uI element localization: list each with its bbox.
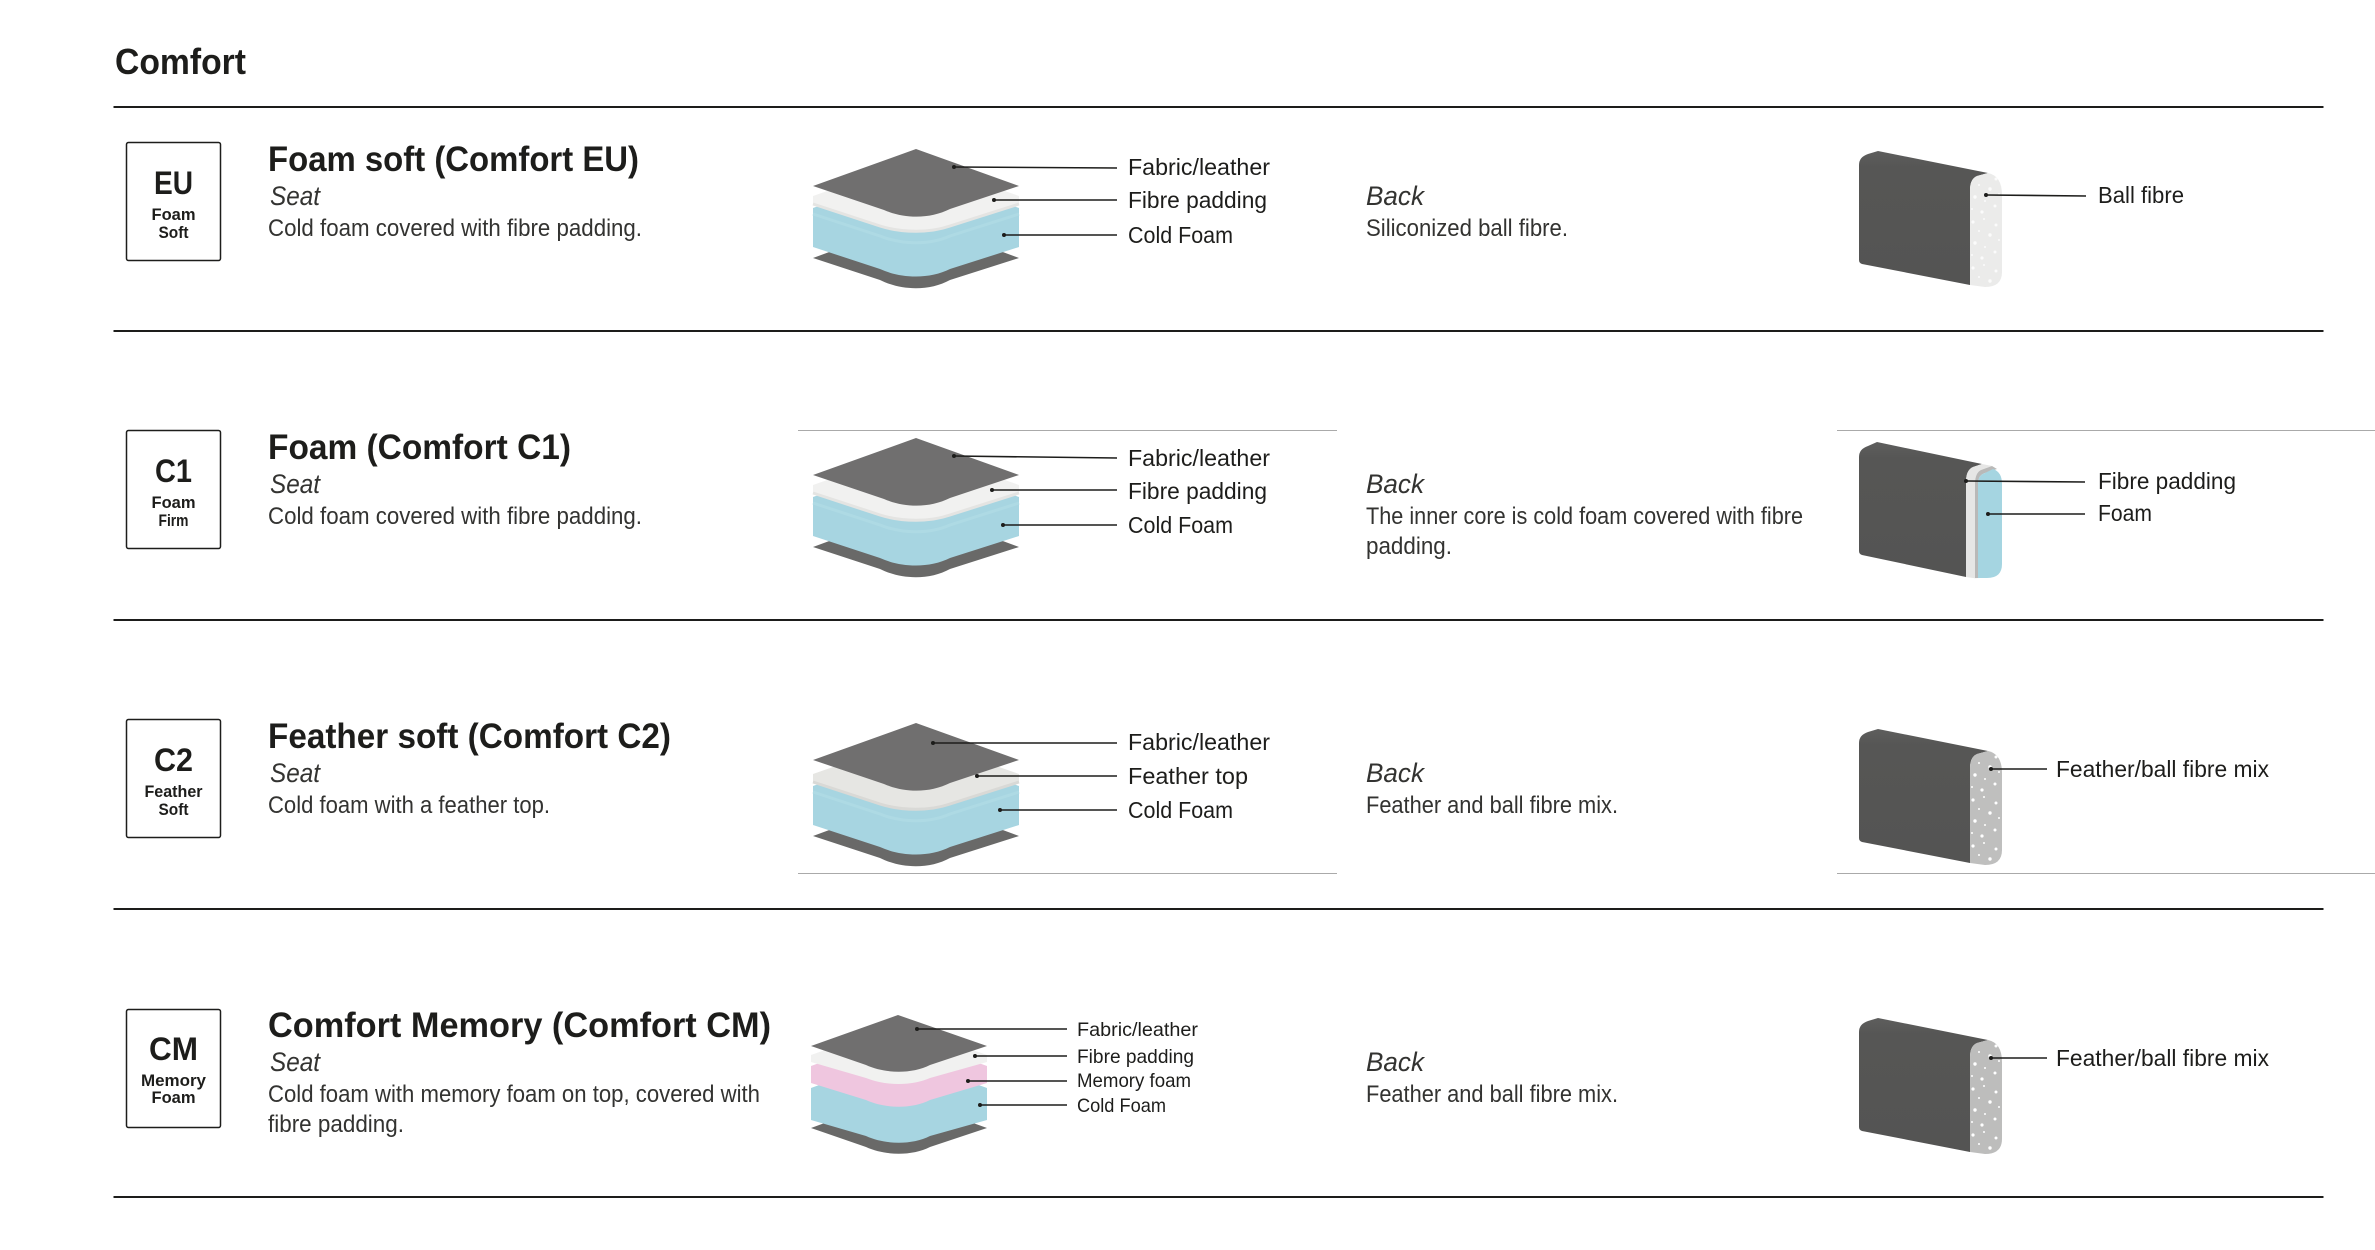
seat layer labels: Cold Foam (1128, 797, 1233, 823)
seat layers diagram (811, 1015, 987, 1154)
back cushion label: Feather/ball fibre mix (2056, 756, 2269, 782)
seat layer labels: Cold Foam (1128, 222, 1233, 248)
badge: C2 (126, 720, 220, 838)
back cushion diagram (1859, 442, 2002, 579)
seat description: Cold foam covered with fibre padding. (268, 503, 642, 530)
back description: Back (1366, 1047, 1425, 1077)
badge: C1: C1 (155, 453, 192, 489)
seat layers diagram (813, 438, 1019, 577)
back description: Back (1366, 181, 1425, 211)
seat description: Cold foam with a feather top. (268, 792, 550, 819)
back description: Siliconized ball fibre. (1366, 215, 1568, 242)
back description: padding. (1366, 533, 1452, 560)
back cushion diagram (1859, 151, 2002, 287)
back cushion label: Ball fibre (2098, 182, 2184, 208)
seat layer labels: Feather top (1128, 763, 1248, 789)
badge: CM (126, 1010, 220, 1128)
seat layer labels: Fabric/leather (1077, 1019, 1199, 1041)
heading: Feather soft: Feather soft (Comfort C2) (268, 717, 671, 756)
badge: C2: Feather (144, 783, 203, 801)
back description (1366, 1047, 1618, 1108)
back cushion label: Feather/ball fibre mix (2056, 1045, 2269, 1071)
back cushion label (1984, 182, 2184, 208)
seat description: Seat (270, 469, 321, 499)
back cushion labels (1964, 468, 2236, 526)
badge: EU: Foam (152, 206, 196, 224)
seat description (268, 758, 550, 819)
seat layer labels (952, 445, 1270, 538)
badge: EU (126, 142, 220, 260)
seat layer labels (931, 729, 1270, 823)
badge: C1 (126, 430, 220, 548)
heading: Foam soft: Foam soft (Comfort EU) (268, 140, 639, 179)
row: Foam soft EU (126, 140, 2184, 288)
back description: Back (1366, 758, 1425, 788)
back description: Back (1366, 469, 1425, 499)
seat layer labels: Cold Foam (1128, 512, 1233, 538)
seat layers diagram (813, 149, 1019, 288)
seat description (268, 181, 642, 242)
badge: C1: Foam (152, 494, 196, 512)
heading: Foam C1: Foam (Comfort C1) (268, 428, 571, 467)
seat description (268, 469, 642, 530)
seat description: Cold foam covered with fibre padding. (268, 215, 642, 242)
seat description: Cold foam with memory foam on top, covered with (268, 1081, 760, 1108)
back description: Feather and ball fibre mix. (1366, 1081, 1618, 1108)
badge: CM: Foam (152, 1089, 196, 1107)
badge: C1: Firm (158, 512, 188, 530)
back description: Feather and ball fibre mix. (1366, 792, 1618, 819)
row: Comfort Memory CM (126, 1006, 2269, 1154)
badge: EU: EU (154, 165, 193, 201)
seat description: Seat (270, 758, 321, 788)
badge: C2: C2 (154, 742, 193, 778)
seat layer labels (952, 154, 1270, 248)
back cushion diagram (1859, 729, 2002, 865)
back cushion diagram (1859, 1018, 2002, 1154)
row: Foam C1 (126, 428, 2236, 579)
seat layer labels: Fibre padding (1128, 478, 1267, 504)
seat layers diagram (813, 723, 1019, 866)
seat layer labels: Memory foam (1077, 1070, 1191, 1092)
seat description: Seat (270, 1047, 321, 1077)
back cushion labels: Fibre padding (2098, 468, 2236, 494)
seat layer labels: Fibre padding (1128, 187, 1267, 213)
seat layer labels: Fibre padding (1077, 1046, 1194, 1068)
seat layer labels (915, 1019, 1199, 1117)
back cushion labels: Foam (2098, 500, 2152, 526)
seat description: fibre padding. (268, 1111, 404, 1138)
heading: Comfort Memory: Comfort Memory (Comfort CM) (268, 1006, 771, 1045)
badge: C2: Soft (158, 801, 189, 819)
seat layer labels: Fabric/leather (1128, 154, 1270, 180)
seat description (268, 1047, 760, 1138)
badge: CM: CM (149, 1031, 198, 1067)
seat layer labels: Fabric/leather (1128, 729, 1270, 755)
seat layer labels: Fabric/leather (1128, 445, 1270, 471)
badge: CM: Memory (141, 1072, 207, 1090)
back description (1366, 758, 1618, 819)
back description (1366, 469, 1803, 560)
back description (1366, 181, 1568, 242)
badge: EU: Soft (158, 224, 189, 242)
seat description: Seat (270, 181, 321, 211)
title: Comfort (115, 41, 246, 82)
back description: The inner core is cold foam covered with fibre (1366, 503, 1803, 530)
row: Feather soft C2 (126, 717, 2269, 866)
seat layer labels: Cold Foam (1077, 1095, 1166, 1117)
